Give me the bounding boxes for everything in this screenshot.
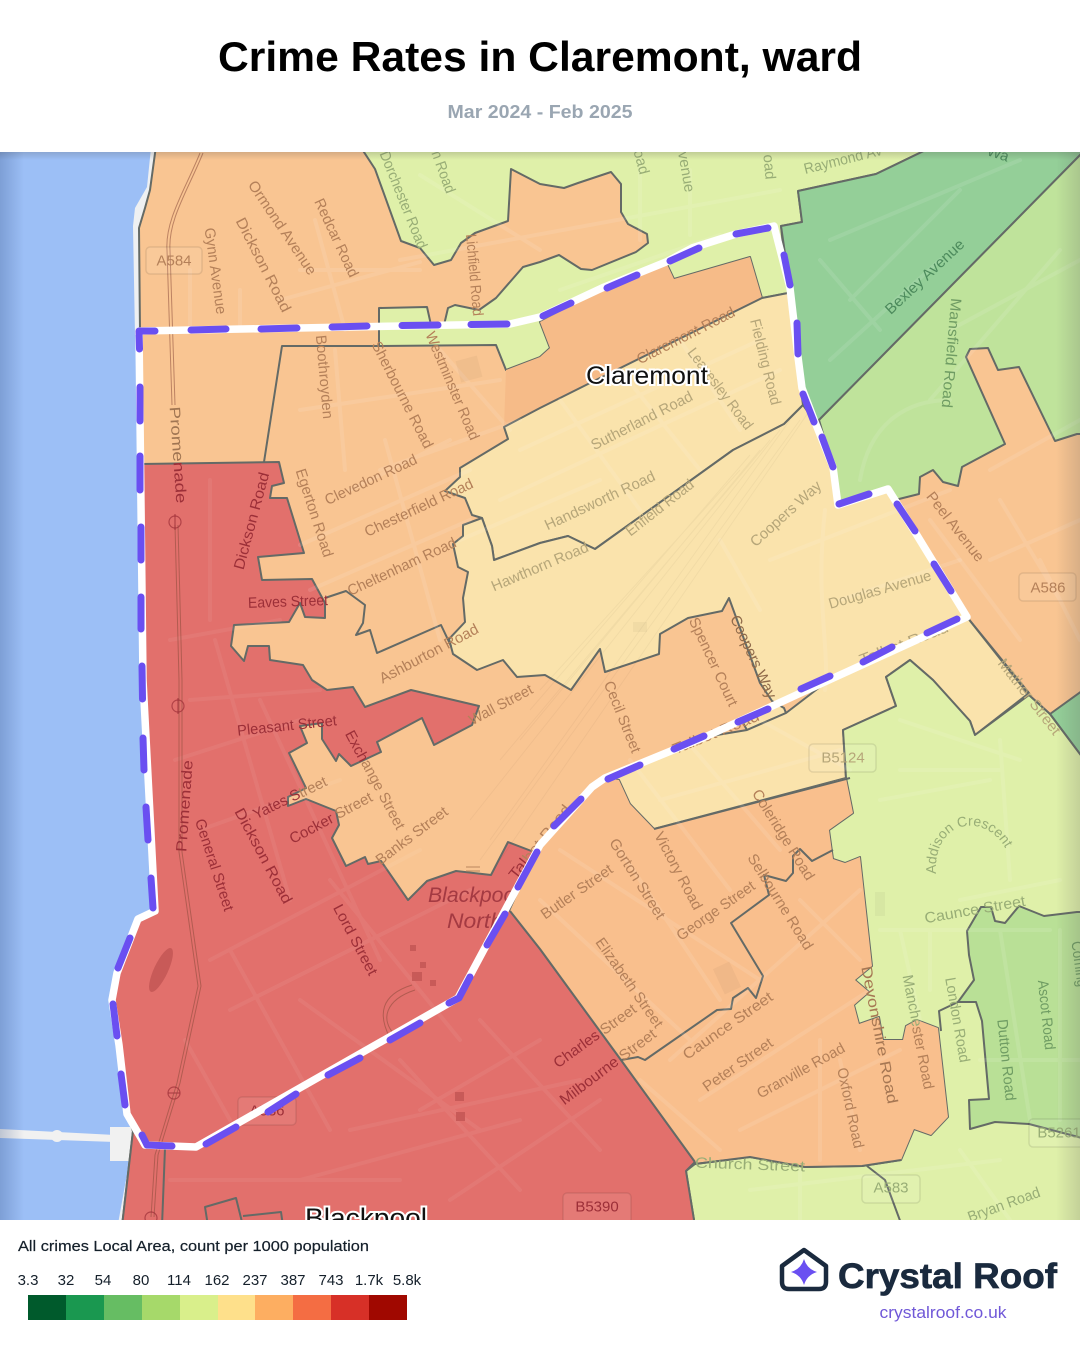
ward internal boundary lines	[162, 346, 1080, 1226]
street labels: ward centre: Peel Avenue	[922, 489, 988, 565]
street labels: red area: General Street	[191, 817, 237, 914]
area: yellow railway and Douglas Avenue	[449, 405, 967, 730]
street labels: south orange: Selbourne Road	[744, 851, 816, 953]
icon: house with star	[782, 1250, 826, 1289]
street labels: red area: Lord Street	[329, 902, 381, 979]
legend title: All crimes Local Area, count per 1000 population	[18, 1238, 369, 1255]
coastal promenade strip	[133, 152, 154, 335]
street labels: north orange: Mansfield Road	[938, 297, 964, 409]
street labels: ward centre: Talbot Road	[506, 801, 574, 883]
place label: Blackpool North: Blackpool	[428, 884, 521, 907]
street labels: ward centre: Leavesley Road	[684, 345, 756, 433]
title: Crime Rates in Claremont, ward	[218, 33, 862, 80]
street labels: east green: Dutton Road	[993, 1018, 1019, 1102]
street labels: south orange	[538, 786, 901, 1150]
area: yellow south of Talbot Road	[605, 617, 1029, 829]
street labels: ward centre	[286, 304, 1065, 883]
road number signs: B5124	[821, 750, 865, 766]
land: orange band north and west	[112, 146, 1080, 1226]
place label: Blackpool North: North	[447, 910, 503, 933]
road number signs: A586	[249, 1102, 285, 1120]
subtitle: date range: Mar 2024 - Feb 2025	[448, 101, 632, 122]
road number signs: B5390	[575, 1198, 619, 1216]
legend value labels: 1.7k	[355, 1272, 384, 1289]
street labels: red area: Milbourne Street	[557, 1025, 660, 1109]
street labels: red area	[166, 406, 660, 1109]
street labels: north orange: n Road	[427, 148, 459, 196]
place label: Blackpool: Blackpool	[305, 1203, 427, 1233]
legend value labels: 54	[95, 1272, 111, 1289]
legend value labels: 32	[58, 1272, 74, 1289]
street labels: north orange: Dorchester Road	[376, 149, 430, 251]
street labels: ward centre: Talbot Road	[857, 619, 951, 669]
street labels: ward centre: Sutherland Road	[588, 388, 696, 454]
legend value labels: 162	[204, 1272, 230, 1289]
southern shore strip	[118, 1176, 127, 1220]
street labels: ward centre: Spencer Court	[685, 615, 741, 710]
website url: crystalroof.co.uk	[880, 1304, 1007, 1322]
street labels: north orange: oad	[759, 154, 779, 180]
street labels: ward centre: Enfield Road	[622, 476, 698, 540]
street labels: east green: Ascot Road	[1034, 979, 1058, 1051]
street labels: north orange: Lichfield Road	[462, 233, 486, 317]
street labels: ward centre: Talbot Road	[670, 708, 762, 758]
street labels: north orange: Redcar Road	[310, 196, 362, 280]
legend value labels: 237	[242, 1272, 268, 1289]
area: dark green corner	[1050, 688, 1080, 762]
promenade tramway	[151, 153, 415, 1217]
street labels: red area: Prome nade	[166, 406, 190, 504]
legend value labels: 387	[280, 1272, 306, 1289]
street labels: red area: Pleasant Street	[236, 712, 338, 740]
area: mid green Mansfield Road	[819, 149, 1080, 505]
street labels: north orange: Ormond Avenue	[244, 178, 320, 278]
ward boundary: white casing and purple dashes	[112, 226, 967, 1147]
legend value labels	[18, 1272, 422, 1289]
street labels: east green: Addison Crescent	[926, 816, 1012, 874]
area: mid green Dutton Road	[958, 906, 1080, 1139]
area: yellow Sutherland Road	[445, 293, 803, 560]
street labels: ward centre: Cheltenham Road	[345, 534, 459, 600]
street labels: east green: Church Street	[695, 1155, 806, 1175]
area: light green east	[686, 660, 1080, 1226]
street labels: south orange: Granville Road	[754, 1040, 848, 1102]
street labels: north orange: Raymond Av	[802, 142, 884, 178]
street labels: north orange: Dickson Road	[232, 215, 294, 315]
street labels: south orange: Victory Road	[650, 829, 706, 913]
street network	[170, 160, 1080, 1220]
street labels: ward centre: Claremont Road	[634, 304, 738, 368]
street labels: ward centre: Boothroyden	[312, 334, 336, 420]
street labels: ward centre: Sherbourne Road	[368, 339, 436, 451]
street labels: south orange: Peter Street	[700, 1034, 777, 1095]
legend value labels: 743	[318, 1272, 344, 1289]
logo: Crystal Roof	[782, 1250, 1057, 1322]
street labels: ward centre: Coopers Way	[747, 477, 825, 550]
street labels: ward centre: Cocker Street	[286, 789, 376, 847]
street labels: ward centre: Egerton Road	[292, 467, 336, 559]
pier	[0, 1127, 134, 1161]
street labels: red area: Dickson Road	[231, 805, 295, 907]
street labels: ward centre: Banks Street	[373, 803, 452, 869]
street labels: south orange: Gorton Street	[605, 835, 669, 923]
legend: colour scale	[18, 1272, 422, 1320]
railway station marks	[145, 945, 465, 1121]
footer panel	[0, 1220, 1080, 1350]
street labels: east green: Manchester Road	[899, 973, 937, 1091]
street labels: north orange: venue	[674, 150, 698, 194]
area: orange south of Talbot Road	[510, 778, 948, 1167]
street labels: red area: Charles Street	[550, 1000, 640, 1072]
legend value labels: 3.3	[18, 1272, 38, 1289]
road number signs	[146, 247, 1080, 1223]
street labels: north orange: Bexley Avenue	[882, 236, 968, 318]
street labels: north orange: oad	[630, 148, 652, 176]
road number signs: A583	[873, 1180, 909, 1196]
building footprints	[456, 356, 885, 994]
street labels: ward centre: Mather Street	[994, 656, 1065, 739]
legend value labels: 80	[133, 1272, 149, 1289]
street labels: red area: Yates Street	[250, 772, 330, 823]
street labels: north orange	[201, 142, 1012, 409]
street labels: ward centre: Hawthorn Road	[489, 539, 591, 595]
sea	[0, 152, 151, 1220]
street labels: north orange: Wa	[985, 143, 1012, 166]
street labels: ward centre: Douglas Avenue	[827, 567, 933, 613]
area: Claremont Road band	[504, 257, 762, 427]
street labels: south orange: George Street	[673, 877, 759, 944]
street labels: east green: London Road	[941, 976, 973, 1064]
tram stops	[145, 514, 480, 1224]
street labels: ward centre: Fielding Road	[746, 317, 784, 407]
street labels: ward centre: Wall Street	[466, 681, 537, 729]
legend value labels: 114	[167, 1272, 191, 1289]
street labels: south orange: Oxford Road	[833, 1066, 867, 1150]
street labels: red area: Eaves Street	[248, 592, 329, 612]
edge vignettes	[0, 152, 1080, 1220]
street labels: east green	[696, 816, 1080, 1266]
legend swatches	[28, 1295, 407, 1320]
area: dark green Bexley Avenue	[781, 146, 1080, 422]
place label: Claremont: Claremont	[586, 362, 708, 390]
place label: Blackpool North	[428, 886, 512, 928]
street labels: east green: Caunce Street	[923, 893, 1028, 927]
street labels: south orange: Butler Street	[538, 860, 617, 923]
street labels: north orange: Gynn Avenue	[201, 227, 229, 315]
road number signs: B5261	[1037, 1124, 1080, 1142]
street labels: ward centre: Westminster Road	[422, 329, 482, 443]
street labels: ward centre: Ashburton Road	[376, 621, 482, 687]
legend value labels: 5.8k	[393, 1272, 422, 1289]
area: red high crime	[112, 462, 695, 1226]
street labels: ward centre: Handsworth Road	[542, 468, 658, 534]
area: light green north	[360, 146, 934, 370]
street labels: ward centre: Exchange Street	[342, 727, 409, 833]
road number signs: A584	[156, 252, 192, 270]
street labels: ward centre: Cecil Street	[600, 679, 644, 756]
street labels: ward centre: Clevedon Road	[322, 451, 420, 509]
street labels: east green: Bryan Road	[965, 1184, 1043, 1226]
wordmark: Crystal Roof	[838, 1257, 1057, 1296]
street labels: south orange: Devonshire Road	[857, 965, 901, 1105]
street labels: south orange: Elizabeth Street	[592, 935, 667, 1032]
street labels: ward centre: Coopers Way	[726, 613, 780, 702]
street labels: red area: Promenade	[173, 760, 197, 852]
street labels: ward centre: Chesterfield Road	[362, 475, 476, 541]
street labels: red area: Dickson Road	[231, 471, 273, 571]
street labels: south orange: Coleridge Road	[748, 786, 818, 884]
road number signs: A586	[1030, 580, 1066, 596]
street labels: south orange: Caunce Street	[680, 988, 777, 1063]
